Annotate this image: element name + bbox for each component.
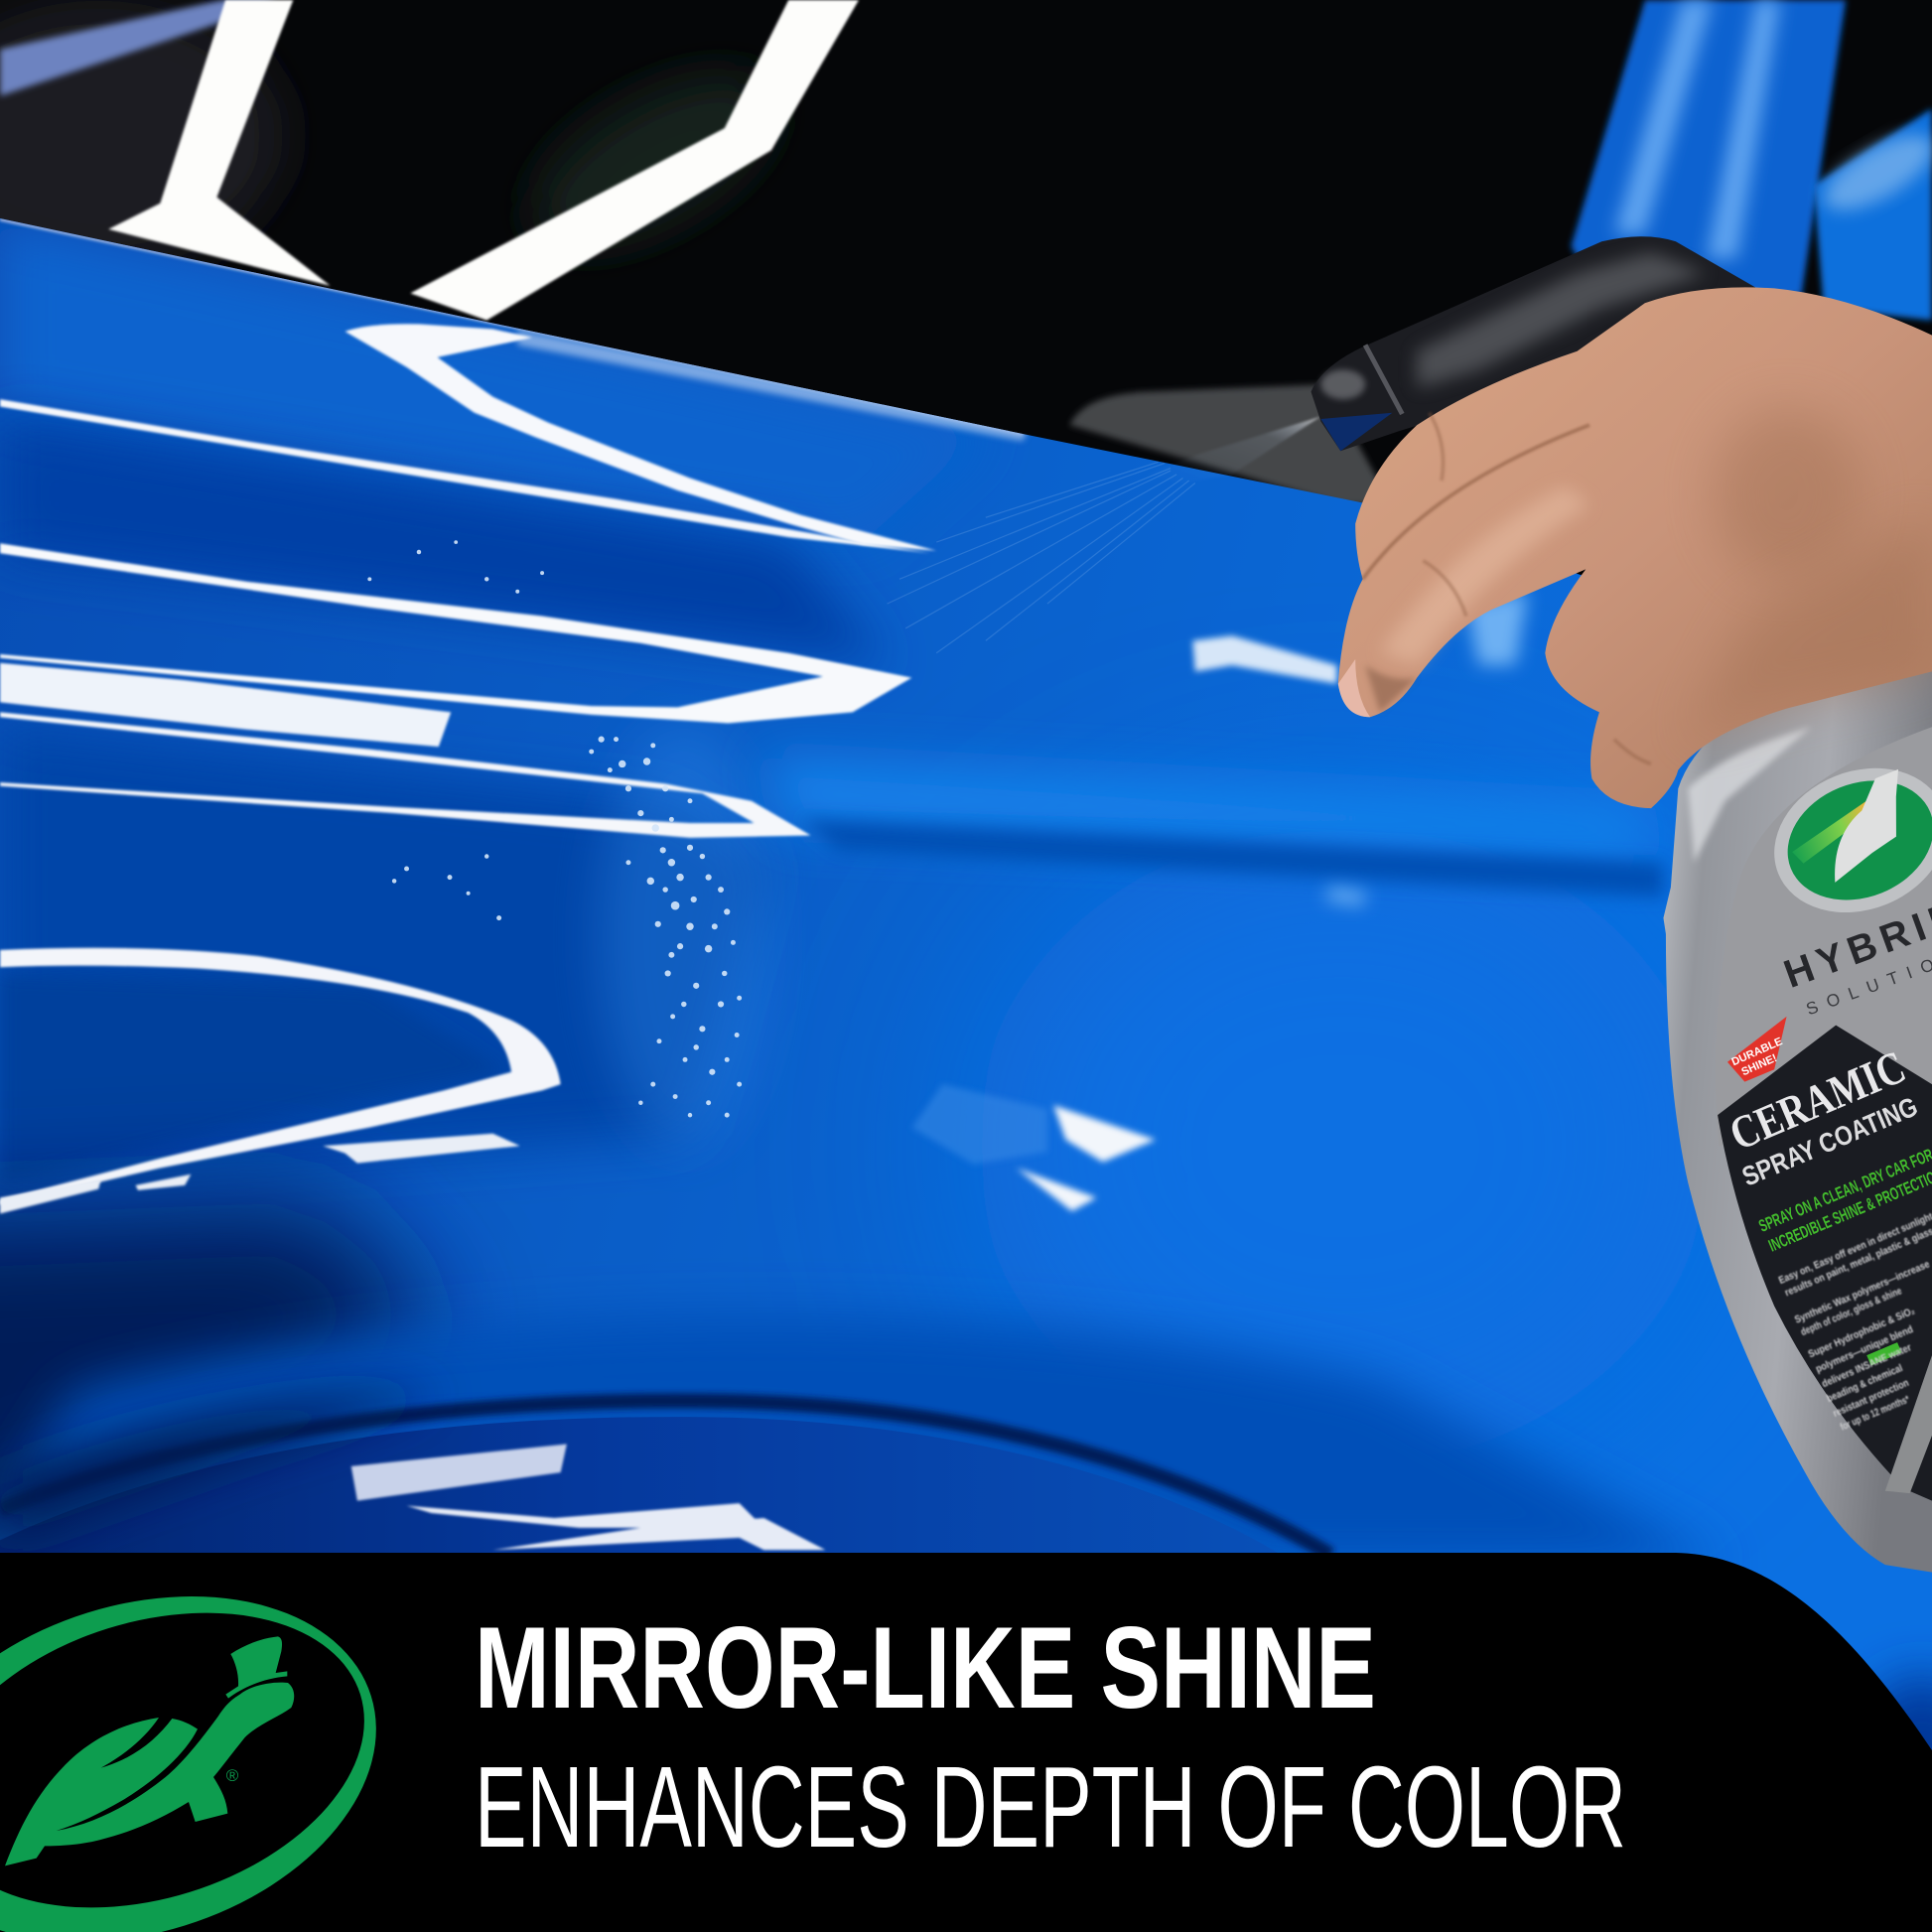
bottle trigger head xyxy=(1311,236,1757,451)
text on the bottle label xyxy=(1723,892,1932,1434)
logo ring inner xyxy=(0,1563,401,1932)
benefit bullets: Super Hydrophobic & SiO₂ xyxy=(1807,1305,1917,1360)
dark arch corner xyxy=(0,1392,444,1540)
knuckle creases xyxy=(1423,413,1651,763)
benefit bullets: depth of color, gloss & shine xyxy=(1799,1285,1903,1338)
benefit bullets: resistant protection xyxy=(1831,1377,1911,1420)
turtle mark xyxy=(1805,769,1929,883)
blue strip at top left xyxy=(0,0,277,96)
durable shine badge xyxy=(1727,1017,1787,1082)
roofline soft reflection xyxy=(517,331,1029,441)
thumb nail xyxy=(1338,659,1370,717)
logo ring outer xyxy=(0,1540,420,1932)
faint green glow in the background xyxy=(505,39,801,281)
gray ledge behind the car xyxy=(1069,384,1392,505)
headline: MIRROR-LIKE SHINE xyxy=(475,1602,1376,1732)
reflection 5: arc xyxy=(0,948,561,1205)
brand logo: turtle in green ellipse xyxy=(0,1540,420,1932)
iridescent stripe xyxy=(1783,787,1900,866)
reflection 4: lower chevron xyxy=(0,712,811,838)
speckled dark wall at upper left xyxy=(0,0,283,271)
droplet haze xyxy=(598,727,770,1146)
white ceiling light reflection: left xyxy=(108,0,331,286)
water droplets xyxy=(367,540,742,1118)
reflection 3: thick foam band xyxy=(0,663,451,747)
photo: car background xyxy=(0,0,1932,517)
bottle shoulder highlight xyxy=(1688,727,1811,863)
reflection 7: blurred windows at center xyxy=(1017,1105,1156,1211)
reflection 2: long chevron xyxy=(0,543,911,724)
bright blue blotches near hand xyxy=(1324,592,1528,905)
lower body dark arch band xyxy=(0,1316,1725,1565)
dark interior of the arc xyxy=(0,973,505,1182)
trigger seam xyxy=(1365,345,1402,414)
darker corner under the banner curve xyxy=(1849,1676,1932,1897)
insane highlight xyxy=(1866,1342,1901,1365)
finger highlight xyxy=(1380,486,1589,665)
benefit bullets: polymers—unique blend xyxy=(1814,1323,1915,1375)
light band beneath hand xyxy=(763,758,1651,857)
reflection 1: chevron xyxy=(345,324,936,551)
reflection 6: slivers under the arc xyxy=(0,1134,520,1213)
crease between index and middle finger xyxy=(1363,425,1589,579)
mist spray xyxy=(1146,416,1320,483)
registered mark: ® xyxy=(226,1766,239,1785)
label dark panel xyxy=(1718,1026,1932,1501)
badge text: DURABLE xyxy=(1730,1035,1784,1068)
nozzle speckle xyxy=(1320,369,1365,399)
dark band mid-left xyxy=(0,727,763,1182)
dark panel reflection xyxy=(1885,1355,1932,1493)
bottom black banner xyxy=(0,1553,1932,1932)
benefit bullets: beading & chemical xyxy=(1825,1362,1904,1405)
reflection 7b: faint box xyxy=(911,1084,1047,1165)
benefit bullets xyxy=(1777,1210,1932,1434)
benefit bullets: delivers INSANE water xyxy=(1820,1341,1913,1390)
hand xyxy=(1338,287,1932,808)
side mirror at the far right xyxy=(1814,108,1932,321)
fingertip shadow at the thumb xyxy=(1365,665,1417,712)
blue car pillar at upper right xyxy=(1571,0,1846,296)
bottle body xyxy=(1663,640,1932,1573)
label textured panel xyxy=(1716,727,1932,1146)
reflection 9b: bottom streaks xyxy=(407,1503,826,1550)
spray bottle with hand xyxy=(1146,236,1932,1573)
reflection 1: thin line xyxy=(0,399,930,553)
dark band under the reflections xyxy=(0,419,888,665)
shaded lower hand xyxy=(1688,517,1932,740)
mirror highlight xyxy=(1813,120,1932,224)
trigger highlights xyxy=(1417,252,1707,388)
badge text 2: SHINE! xyxy=(1739,1052,1779,1078)
dark studio background xyxy=(0,0,1932,517)
bright right-hand panel xyxy=(976,880,1473,1340)
crease shadow along the door xyxy=(801,819,1663,897)
logo emblem on the bottle xyxy=(1752,743,1932,937)
spray mist on the paint xyxy=(888,462,1195,653)
reflection 9: bottom window xyxy=(351,1445,567,1501)
navy shadow at lower left xyxy=(0,1201,444,1589)
turtle mark xyxy=(5,1636,294,1865)
white ceiling light reflection: right xyxy=(410,0,859,321)
wheel arch dark shadow line xyxy=(0,1401,1330,1555)
upper panel tone xyxy=(0,221,946,488)
car body panel xyxy=(0,218,1932,1750)
pillar highlights xyxy=(1614,0,1780,259)
shadow on the back of the hand xyxy=(1713,407,1861,579)
blue nozzle tip xyxy=(1320,413,1392,451)
reflection 8: near the thumb xyxy=(1192,635,1337,684)
arch lower panel xyxy=(0,1417,1288,1559)
thin roofline highlight xyxy=(0,219,1023,434)
